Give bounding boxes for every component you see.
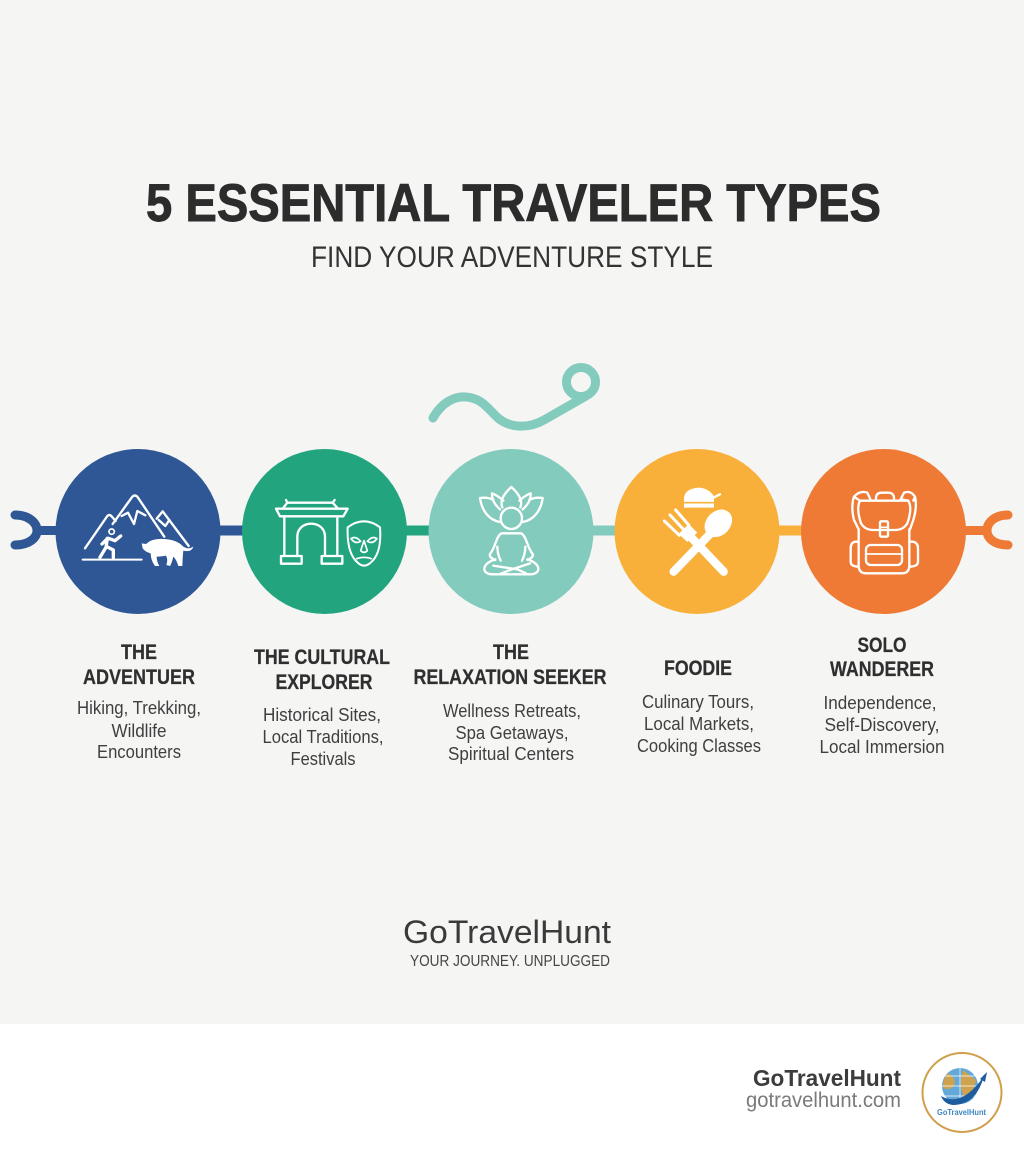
connector: yellow to orange [778,526,803,536]
description: Spa Getaways, [456,723,568,743]
description: Spiritual Centers [448,744,574,764]
heading: FOODIE [664,657,732,680]
description: Wildlife [112,721,166,741]
icon: backpack [851,492,918,573]
description: Local Markets, [644,714,754,734]
heading: THE [493,641,529,664]
heading: THE [121,641,157,664]
description: Local Immersion [820,737,944,757]
heading: EXPLORER [276,671,372,694]
description: Local Traditions, [262,727,384,747]
connector: teal to yellow [591,526,616,536]
connector: green to teal [405,526,430,536]
brand tagline: YOUR JOURNEY. UNPLUGGED [410,953,610,970]
description: Wellness Retreats, [443,701,581,721]
connector: right hook [962,515,1008,545]
footer brand name: GoTravelHunt [753,1065,901,1091]
panel: the adventurer [56,449,220,762]
description: Cooking Classes [637,736,761,756]
title: 5 ESSENTIAL TRAVELER TYPES [146,174,881,233]
green circle [242,449,407,614]
heading: RELAXATION SEEKER [414,666,606,689]
heading [83,641,195,689]
footer url: gotravelhunt.com [746,1089,901,1112]
description [262,705,384,769]
description: Hiking, Trekking, [77,698,201,718]
description: Historical Sites, [263,705,381,725]
panel: the relaxation seeker [414,449,606,764]
heading: THE CULTURAL [254,646,390,669]
brand wordmark: GoTravelHunt [403,914,611,950]
heading: SOLO [858,634,906,657]
panel: foodie [614,449,780,756]
teal circle [428,449,594,614]
heading [830,634,934,681]
description: Culinary Tours, [642,692,754,712]
heading: ADVENTUER [83,666,195,689]
panel: the cultural explorer [242,449,407,769]
description: Encounters [97,742,181,762]
description [820,693,944,757]
description [637,692,761,756]
description [77,698,201,762]
yellow circle [614,449,780,614]
footer panel [0,1024,1024,1154]
connector: blue to green [218,526,244,536]
heading [414,641,606,689]
heading [254,646,390,694]
logo badge: GoTravelHunt [937,1108,986,1117]
squiggle path with ring [433,368,596,426]
orange circle [801,449,966,614]
icon: arch and mask [276,500,380,566]
icon: hat, fork and spoon [664,488,738,572]
description: Self-Discovery, [824,715,940,735]
description [443,701,581,764]
connector: left hook [15,515,60,545]
subtitle: FIND YOUR ADVENTURE STYLE [311,241,713,274]
heading: WANDERER [830,658,934,681]
icon: mountains, hiker and animal [83,495,193,566]
blue circle [56,449,220,614]
panel: solo wanderer [801,449,966,757]
description: Independence, [824,693,936,713]
logo badge [922,1053,1002,1132]
icon: meditating figure with lotus [480,487,543,574]
description: Festivals [290,749,356,769]
